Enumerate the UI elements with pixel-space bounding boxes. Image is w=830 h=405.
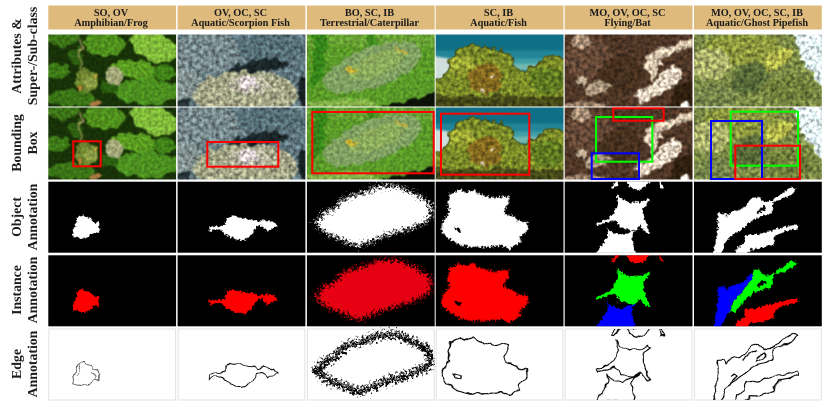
header: fish: SC, IB (484, 8, 513, 19)
mask caterpillar (317, 261, 430, 318)
header: caterpillar (307, 6, 435, 30)
edges caterpillar (317, 334, 431, 393)
header: caterpillar: Terrestrial/Caterpillar (320, 18, 419, 29)
header: fish (436, 6, 564, 30)
object annotation row (48, 181, 822, 254)
row label: object annotation: Object (9, 197, 24, 237)
header: bat: Flying/Bat (604, 18, 651, 29)
photo: scorpion fish with box (178, 108, 306, 180)
photo: bat (564, 34, 692, 106)
header: scorpion fish (178, 6, 305, 30)
row labels (9, 6, 40, 397)
edges fish bat pipefish (442, 328, 798, 401)
photo row: bounding boxes (48, 107, 822, 180)
header: caterpillar: BO, SC, IB (345, 8, 394, 19)
header: ghost pipefish (694, 6, 822, 30)
row label: attributes and super-/sub-class: Attributes & (9, 18, 24, 94)
header: ghost pipefish: Aquatic/Ghost Pipefish (706, 18, 808, 29)
photo: fish (436, 34, 564, 106)
photo: frog with box (48, 108, 176, 180)
photo: ghost pipefish with boxes (694, 108, 822, 180)
cell backgrounds (49, 329, 821, 400)
instance annotation row (48, 255, 822, 328)
masks fish bat pipefish (442, 181, 798, 254)
photo row: attributes (48, 34, 822, 106)
row label: attributes and super-/sub-class (9, 6, 40, 105)
mask caterpillar (317, 187, 430, 245)
header: frog: SO, OV (94, 8, 129, 19)
header: ghost pipefish: MO, OV, OC, SC, IB (711, 8, 803, 19)
column headers (48, 6, 822, 30)
row label: edge annotation: Edge (9, 349, 24, 379)
photo: frog (48, 34, 176, 106)
row label: instance annotation (9, 256, 40, 323)
bounding boxes (73, 108, 800, 179)
masks frog and scorpion fish (73, 289, 278, 314)
photo: ghost pipefish (694, 34, 822, 106)
row label: bounding box (9, 114, 40, 172)
header: scorpion fish: Aquatic/Scorpion Fish (191, 18, 290, 29)
cell backgrounds (48, 255, 822, 326)
row label: bounding box: Bounding (9, 114, 24, 172)
photo: caterpillar (306, 34, 435, 106)
header: fish: Aquatic/Fish (470, 18, 527, 29)
cell backgrounds (48, 182, 822, 253)
row label: attributes and super-/sub-class: Super-/Sub-class (25, 6, 40, 105)
photo: fish with box (436, 108, 564, 180)
masks fish bat pipefish (442, 255, 798, 328)
header: bat: MO, OV, OC, SC (590, 8, 665, 19)
edges frog and scorpion fish (73, 362, 278, 387)
row label: edge annotation: Annotation (25, 330, 40, 397)
masks frog and scorpion fish (73, 215, 278, 240)
row label: object annotation: Annotation (25, 183, 40, 250)
photo: caterpillar with box (306, 108, 435, 180)
row label: object annotation (9, 183, 40, 250)
header: frog (48, 6, 176, 30)
header: scorpion fish: OV, OC, SC (214, 8, 267, 19)
edge annotation row (49, 328, 821, 401)
row label: instance annotation: Annotation (25, 256, 40, 323)
row label: edge annotation (9, 330, 40, 397)
header: frog: Amphibian/Frog (74, 18, 149, 29)
row label: instance annotation: Instance (9, 265, 24, 315)
row label: bounding box: Box (25, 131, 40, 154)
photo: bat with boxes (564, 108, 692, 180)
header: bat (565, 6, 692, 30)
photo: scorpion fish (178, 34, 306, 106)
